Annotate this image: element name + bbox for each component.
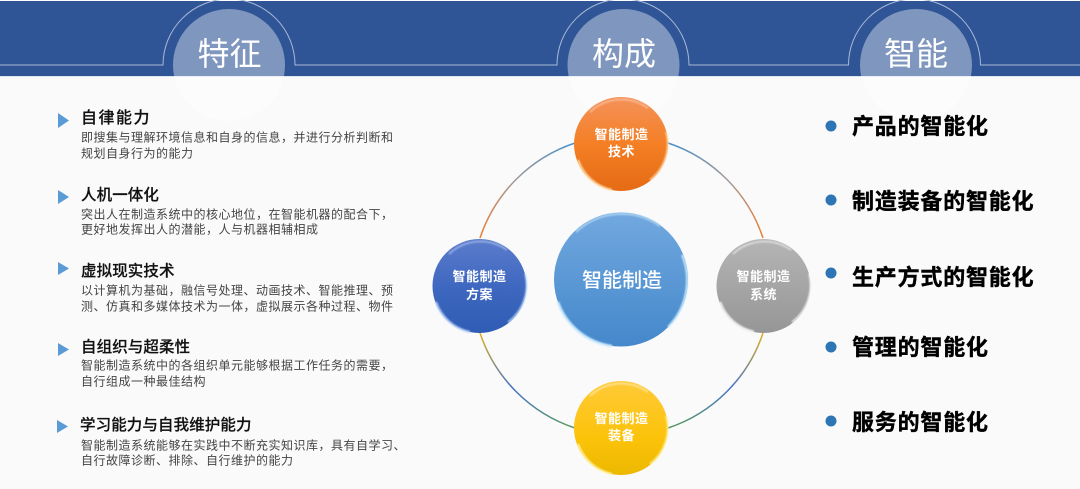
diagram: composition ring <box>432 97 810 475</box>
feature: 自组织与超柔性: 自行组成一种最佳结构 <box>81 374 206 388</box>
node: 智能制造 center: 智能制造 <box>582 269 662 292</box>
heading: 智能: 智能 <box>884 36 948 72</box>
feature: 自律能力: 规划自身行为的能力 <box>81 146 194 160</box>
item: 管理的智能化: 管理的智能化 <box>852 335 989 360</box>
feature: 学习能力与自我维护能力: 学习能力与自我维护能力 <box>80 415 252 434</box>
node: 智能制造方案: 智能制造 <box>452 269 507 284</box>
node: 智能制造技术 <box>574 97 668 191</box>
panel: intelligence list <box>826 114 1034 435</box>
heading: 构成: 构成 <box>592 36 656 72</box>
feature: 学习能力与自我维护能力: 自行故障诊断、排除、自行维护的能力 <box>81 452 294 468</box>
node: 智能制造系统 <box>716 239 810 333</box>
node: 智能制造装备: 智能制造 <box>594 411 649 426</box>
node: 智能制造 center <box>554 212 688 346</box>
heading: 特征: 特征 <box>197 36 262 72</box>
feature: 学习能力与自我维护能力: 智能制造系统能够在实践中不断充实知识库，具有自学习、 <box>81 438 406 452</box>
feature: 自组织与超柔性 <box>58 338 394 388</box>
node: 智能制造方案: 方案 <box>466 287 493 302</box>
node: 智能制造装备: 装备 <box>608 428 635 443</box>
feature: 人机一体化: 人机一体化 <box>81 186 159 204</box>
node: 智能制造系统: 智能制造 <box>736 269 791 284</box>
node: 智能制造技术: 技术 <box>608 144 635 159</box>
feature: 自组织与超柔性: 智能制造系统中的各组织单元能够根据工作任务的需要， <box>81 358 394 372</box>
heading: 构成 <box>568 9 680 121</box>
node: 智能制造方案 <box>432 239 526 333</box>
panel: features list <box>57 109 406 468</box>
feature: 自律能力: 即搜集与理解环境信息和自身的信息，并进行分析判断和 <box>81 130 394 144</box>
feature: 自律能力: 自律能力 <box>81 109 151 127</box>
ring arcs <box>480 143 763 428</box>
node: 智能制造系统: 系统 <box>750 287 777 302</box>
item: 生产方式的智能化: 生产方式的智能化 <box>852 265 1034 290</box>
heading: 智能 <box>860 9 972 121</box>
feature: 学习能力与自我维护能力 <box>57 415 406 468</box>
item: 制造装备的智能化: 制造装备的智能化 <box>852 189 1034 214</box>
feature: 自律能力 <box>58 109 394 160</box>
node: 智能制造装备 <box>574 381 668 475</box>
feature: 虚拟现实技术: 虚拟现实技术 <box>81 261 175 280</box>
feature: 虚拟现实技术: 以计算机为基础，融信号处理、动画技术、智能推理、预 <box>81 282 394 298</box>
item: 服务的智能化: 服务的智能化 <box>852 410 989 435</box>
header band <box>0 0 1080 77</box>
node: 智能制造技术: 智能制造 <box>594 127 649 142</box>
feature: 人机一体化 <box>58 186 394 236</box>
heading: 特征 <box>173 9 285 121</box>
feature: 虚拟现实技术: 测、仿真和多媒体技术为一体，虚拟展示各种过程、物件 <box>81 298 394 314</box>
feature: 虚拟现实技术 <box>58 261 394 314</box>
feature: 人机一体化: 更好地发挥出人的潜能，人与机器相辅相成 <box>81 222 319 236</box>
feature: 人机一体化: 突出人在制造系统中的核心地位，在智能机器的配合下， <box>81 206 394 222</box>
item: 产品的智能化: 产品的智能化 <box>852 114 989 139</box>
feature: 自组织与超柔性: 自组织与超柔性 <box>81 338 190 356</box>
